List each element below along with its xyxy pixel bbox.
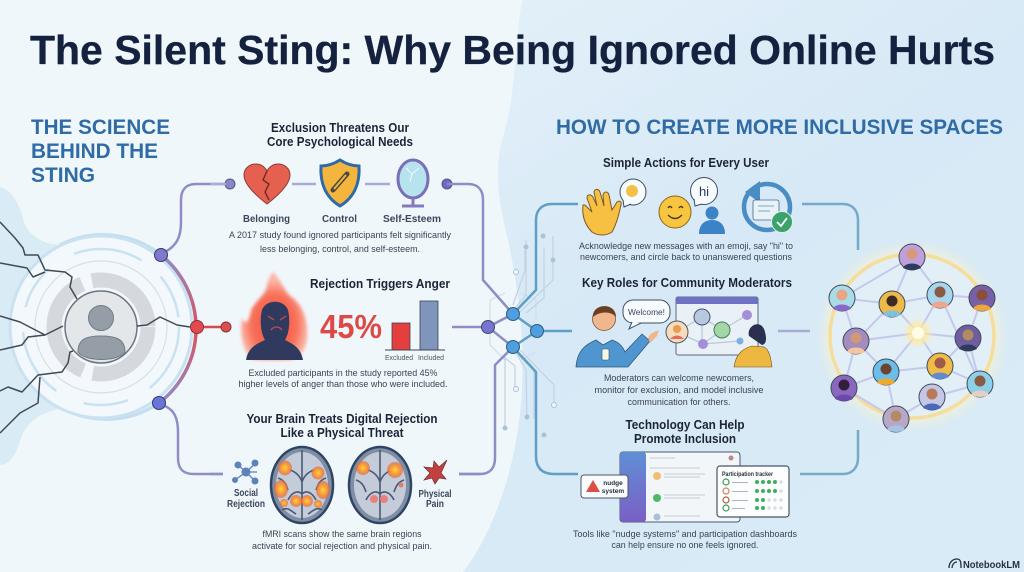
label: physical pain (418, 488, 452, 510)
icon: waving hand with emoji bubble (583, 179, 646, 235)
text (594, 373, 764, 407)
links (842, 257, 982, 419)
avatars (829, 244, 995, 432)
icon: moderator with welcome bubble: Welcome! (628, 308, 665, 317)
heading: Your Brain Treats Digital Rejection (246, 412, 438, 426)
heading: the science behind the sting: STING (31, 164, 95, 187)
text: Excluded participants in the study reported 45% (248, 368, 438, 378)
callout: nudge system (581, 475, 628, 498)
connector dashes (778, 330, 810, 332)
icon: broken heart (244, 164, 290, 204)
stat: 45 percent: 45% (320, 308, 382, 345)
text (238, 368, 448, 389)
connector: blue out of hub (513, 204, 578, 474)
text (579, 241, 793, 262)
heading: the science behind the sting: BEHIND THE (31, 140, 158, 163)
panel: technology can help (573, 418, 858, 550)
connector dashes (210, 473, 480, 475)
icon: dashboard window (620, 452, 740, 522)
central circuit hub (447, 184, 578, 474)
panel: community moderators (576, 276, 810, 407)
node: bottom purple (152, 396, 166, 410)
icon: pain burst (424, 460, 447, 484)
heading: Core Psychological Needs (267, 135, 413, 149)
background: right pale blue area (463, 0, 1024, 572)
heading (626, 418, 745, 446)
icon: brain scan right (349, 447, 411, 523)
heading: Exclusion Threatens Our (271, 121, 409, 135)
illustration: isolated user with cracks (0, 187, 196, 465)
cracks (0, 222, 190, 433)
text: Tools like "nudge systems" and participation dashboards (573, 529, 797, 539)
text: communication for others. (628, 397, 730, 407)
heading: Simple Actions for Every User (603, 156, 769, 170)
label: social rejection: Social (234, 487, 258, 499)
heading: Like a Physical Threat (280, 426, 404, 440)
callout: nudge system: nudge (603, 480, 623, 487)
heading: the science behind the sting (31, 116, 170, 187)
heading: Technology Can Help (626, 418, 745, 432)
text: monitor for exclusion, and model inclusive (594, 385, 764, 395)
label: belonging: Belonging (243, 213, 290, 225)
text: Moderators can welcome newcomers, (604, 373, 754, 383)
label: control: Control (322, 213, 357, 225)
illustration: connected community network (822, 244, 1002, 432)
connector: purple into hub (447, 184, 513, 474)
label: self-esteem: Self-Esteem (383, 213, 441, 225)
label: physical pain: Physical (418, 488, 452, 500)
panel: simple actions (579, 156, 858, 262)
heading: how to create more inclusive spaces: HOW TO CREATE MORE INCLUSIVE SPACES (556, 116, 1003, 139)
bar chart: excluded vs included (385, 301, 445, 362)
bodies (833, 264, 991, 432)
connector dashes (800, 430, 858, 474)
text: Acknowledge new messages with an emoji, say "hi" to (579, 241, 793, 251)
text (573, 529, 797, 550)
icon: brain scan left (271, 447, 333, 523)
text: newcomers, and circle back to unanswered questions (580, 252, 792, 262)
text: A 2017 study found ignored participants felt significantly (229, 230, 451, 240)
connector dashes (802, 204, 858, 250)
heading: the science behind the sting: THE SCIENCE (31, 116, 170, 139)
bar chart: excluded vs included: Included (418, 355, 444, 362)
icon: angry figure in flames (241, 272, 307, 360)
panel: brain treats digital rejection (210, 412, 480, 551)
nodes (506, 308, 520, 320)
icon: shield with chain (321, 160, 359, 206)
node: center red (190, 320, 204, 334)
panel: rejection triggers anger (238, 272, 450, 389)
connector: arc nodes to left panels (152, 179, 235, 474)
icon: smile, hi bubble, person (659, 178, 725, 234)
heading: Rejection Triggers Anger (310, 277, 450, 291)
connector dashes (210, 183, 390, 185)
bar chart: excluded vs included: Excluded (385, 355, 413, 362)
panel: participation tracker: Participation tracker (722, 471, 773, 478)
text (252, 529, 432, 551)
label: physical pain: Pain (426, 498, 444, 510)
icon: community screen (666, 297, 772, 367)
label: social rejection (227, 487, 265, 510)
icon: social network nodes (232, 460, 258, 484)
heading: Key Roles for Community Moderators (582, 276, 792, 290)
panel: participation tracker (717, 466, 789, 517)
text: higher levels of anger than those who were included. (238, 379, 448, 389)
heading: Promote Inclusion (634, 432, 736, 446)
heading (246, 412, 438, 440)
text: less belonging, control, and self-esteem. (260, 244, 420, 254)
callout: nudge system: system (602, 488, 624, 495)
node: top purple (154, 248, 168, 262)
icon: moderator with welcome bubble (576, 300, 670, 367)
icon: circular arrow with chat and check (744, 181, 792, 232)
text: activate for social rejection and physical pain. (252, 541, 432, 551)
node right (442, 179, 452, 189)
label: social rejection: Rejection (227, 498, 265, 510)
icon: cracked mirror (398, 160, 428, 206)
panel: exclusion threatens core needs (210, 121, 452, 254)
icon: smile, hi bubble, person: hi (699, 184, 709, 199)
title: The Silent Sting: Why Being Ignored Online Hurts (30, 27, 995, 73)
text: can help ensure no one feels ignored. (612, 540, 758, 550)
text: fMRI scans show the same brain regions (262, 529, 422, 539)
heading (267, 121, 413, 149)
heads (836, 248, 988, 422)
text (229, 230, 451, 254)
